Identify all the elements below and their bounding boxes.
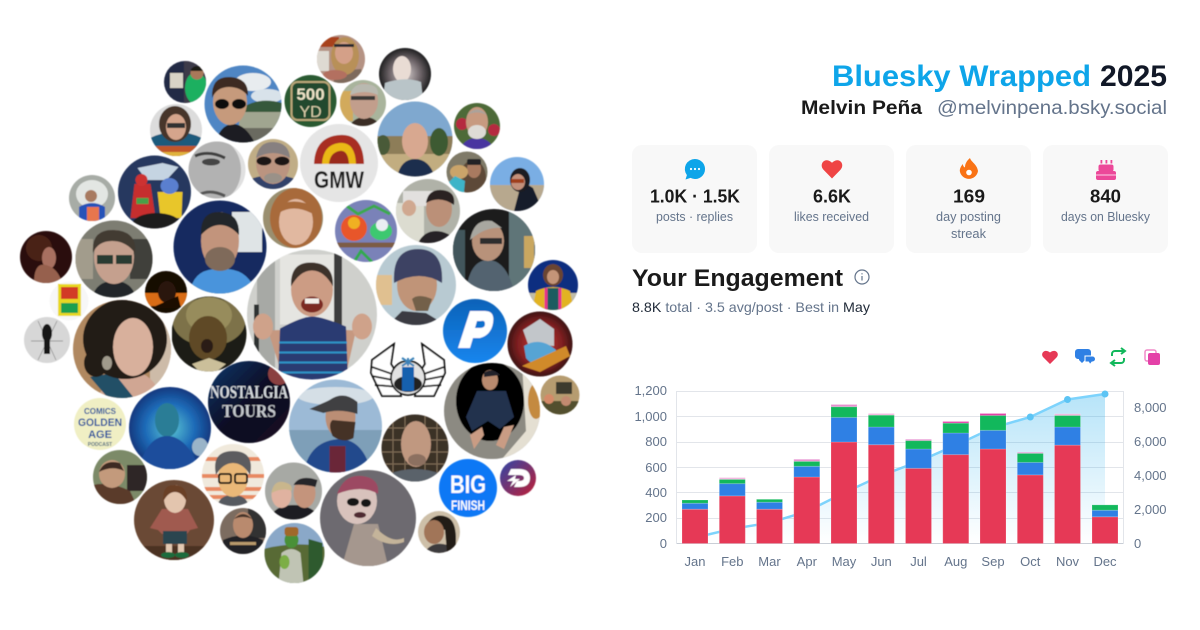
stat card: posts and replies: 1.0K · 1.5K [650,186,740,206]
left axis labels: 600 [645,460,667,475]
stacked bars [682,404,1118,544]
user name and handle: @melvinpena.bsky.social [937,98,1167,119]
avatar: woman with curly dark hair [73,299,171,398]
month labels: Nov [1056,554,1080,569]
avatar: older man with tortoiseshell sunglasses [248,139,298,189]
left axis labels: 0 [660,536,667,551]
avatar: blue P logo [443,299,507,363]
right axis labels: 0 [1134,536,1141,551]
avatar: Big Finish [439,459,497,517]
month labels: Jun [871,554,892,569]
avatar: man with curly dark hair [20,231,72,283]
avatar: headset woman [317,35,365,83]
avatar: superhero mural [118,155,192,235]
avatar: birds illustration [335,200,397,262]
avatar bubble cluster [20,35,580,584]
avatar: GMW logo [300,124,378,202]
avatar: Tardis with wings emblem [371,344,445,396]
user name and handle: Melvin Peña [801,98,922,119]
icon: birthday cake [1096,160,1116,180]
month labels: Feb [721,554,744,569]
avatar: person in yellow floral jacket [528,260,578,310]
left axis labels: 1,000 [634,409,667,424]
avatar: man with white beard and red flowers [454,103,500,149]
month labels: Sep [981,554,1005,569]
stat card: likes received: likes received [794,209,869,224]
avatar: man by Tardis in green shirt [164,61,207,104]
avatar: woman on beach [490,157,544,211]
title: Bluesky Wrapped 2025: Bluesky Wrapped [832,60,1091,93]
avatar: man in bright blue shirt [173,200,267,294]
icon: info [855,270,869,284]
avatar: man in sunglasses above town [204,65,283,143]
chart: monthly engagement stacked bars with cumulative area [634,383,1167,569]
avatar: man in ball chair [444,361,544,459]
avatar: Big Finish: BIG [450,471,486,499]
avatar: woman with long dark hair [418,511,460,553]
avatar: bald man on grid [381,414,449,482]
avatar: man in straw hat [172,296,248,372]
grid lines [676,391,1124,544]
avatar: foil hat with blue mask [508,312,572,376]
month labels: Aug [944,554,967,569]
avatar: man on covered bridge [69,175,115,221]
avatar: big center man laughing [247,250,377,380]
avatar: man in cap and flannel by lake [288,379,382,473]
avatar: man with dark-framed glasses [75,220,153,298]
icon: legend replies [1075,349,1096,364]
avatar: silhouette on orange [145,271,187,313]
avatar: silhouette figure diagram [24,317,70,363]
icon: flame [960,158,978,179]
left axis labels: 800 [645,434,667,449]
month labels: Jul [910,554,927,569]
icon: speech bubble [685,159,705,180]
avatar: woman with glasses and striped jacket [150,104,202,157]
avatar: Comics in the Golden Age podcast [74,397,126,451]
avatar: 500 YD badge: YD [299,104,322,121]
avatar: horse and flowers painting [540,375,580,415]
avatar: Dlive style D logo [500,460,536,496]
cumulative area [695,394,1105,544]
avatar: Comics in the Golden Age podcast: COMICS [84,407,117,416]
engagement summary: 8.8K total · 3.5 avg/post · Best in May [632,299,870,315]
month labels [685,554,1117,569]
stat card: day posting streak: streak [951,226,986,241]
avatar: GMW logo: GMW [314,167,364,194]
avatar: Nostalgia Tours: NOSTALGIA [210,382,288,402]
stat card: likes received: 6.6K [813,186,851,206]
avatar: green figure in field [264,522,326,584]
right axis labels [1134,400,1167,551]
icon: heart [822,160,842,178]
icon: legend heart [1042,351,1058,364]
title: Bluesky Wrapped 2025: 2025 [1100,60,1167,93]
left axis labels: 400 [645,485,667,500]
avatar: bald man at beach town [376,101,453,177]
avatar: Nostalgia Tours: TOURS [222,401,276,421]
avatar: man with headphones on couch [93,450,147,504]
stat card: posts and replies [632,145,757,253]
avatar: Comics in the Golden Age podcast: GOLDEN [78,417,122,429]
avatar: Nostalgia Tours [208,361,290,443]
avatar: man in dark tee [220,508,266,554]
month labels: Jan [685,554,705,569]
stat card: days on Bluesky: 840 [1090,186,1121,206]
left axis labels: 200 [645,510,667,525]
avatar: man leaning from Tardis [453,209,535,291]
month labels: Mar [758,554,781,569]
avatar: man in navy beanie [376,245,456,325]
stat card: days on Bluesky [1043,145,1168,253]
stat card: likes received [769,145,894,253]
month labels: May [832,554,857,569]
avatar: pale doll figure [320,470,416,566]
avatar: man holding name card [396,179,460,243]
avatar: 500 YD badge [284,75,336,127]
stat card: posts and replies: posts · replies [656,209,733,224]
avatar: bitmoji [201,443,265,507]
stat card: days on Bluesky: days on Bluesky [1061,209,1150,224]
avatar: Santa Claus comic [50,282,88,320]
right axis labels: 4,000 [1134,468,1167,483]
user name and handle [801,98,1167,119]
avatar: grayscale face closeup [188,141,246,199]
right axis labels: 6,000 [1134,434,1167,449]
avatar: knitted doll on brown [134,480,214,560]
left axis labels [634,383,667,551]
avatar: Comics in the Golden Age podcast: AGE [88,429,112,441]
avatar: blue cyber figure [129,387,211,469]
heading: Your Engagement: Your Engagement [632,265,843,292]
stat card: day posting streak: 169 [953,186,985,206]
avatar: 500 YD badge: 500 [296,85,325,104]
avatar: man with dog [446,151,488,196]
month labels: Apr [797,554,818,569]
avatar: woman with red hair [263,188,323,248]
cumulative line [695,390,1108,538]
icon: legend reposts [1111,348,1125,366]
month labels: Dec [1093,554,1117,569]
avatar: Big Finish: FINISH [451,497,485,513]
avatar: glowing dark portrait [379,48,431,100]
left axis labels: 1,200 [634,383,667,398]
avatar: older man in glasses [340,80,386,126]
chart legend icons [1042,348,1160,366]
right axis labels: 2,000 [1134,502,1167,517]
stat card: day posting streak: day posting [936,209,1001,224]
month labels: Oct [1020,554,1041,569]
avatar: two people [264,462,322,520]
avatar: Comics in the Golden Age podcast: PODCAST [88,442,112,448]
icon: legend quotes [1145,350,1160,365]
right axis labels: 8,000 [1134,400,1167,415]
stat card: day posting streak [906,145,1031,253]
